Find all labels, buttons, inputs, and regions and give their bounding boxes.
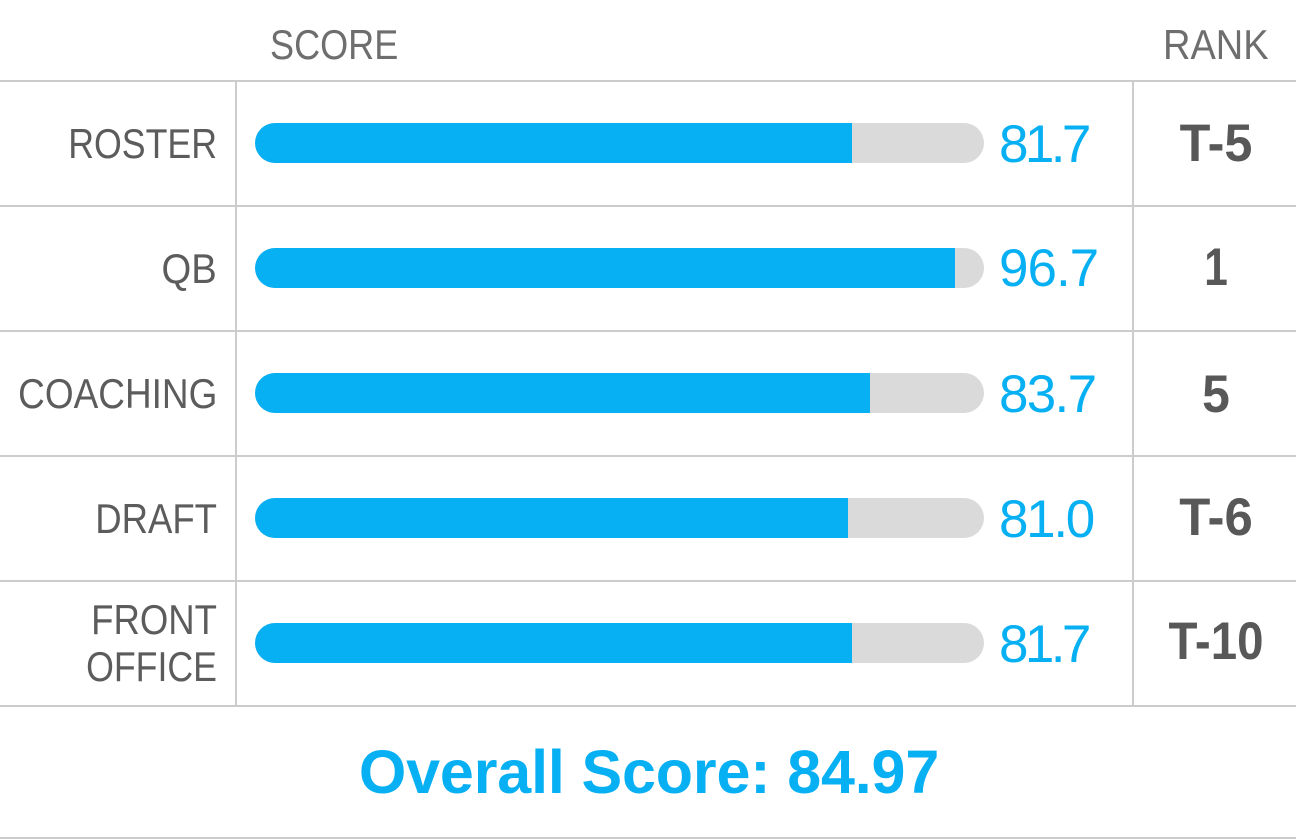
rank: draft: T-6	[1179, 488, 1253, 547]
row label: roster: ROSTER	[68, 120, 217, 167]
rank: roster: T-5	[1180, 114, 1252, 173]
score: draft: 81.0	[999, 490, 1093, 549]
rank: front office: T-10	[1169, 612, 1263, 671]
column header: score: SCORE	[270, 21, 398, 68]
row label: draft: DRAFT	[95, 495, 217, 542]
row label: front office: FRONT	[91, 596, 217, 643]
column header: rank: RANK	[1163, 21, 1269, 68]
row label: front office	[86, 596, 217, 690]
bar: qb	[255, 248, 984, 288]
rank: qb: 1	[1204, 238, 1228, 297]
row label: front office: OFFICE	[86, 643, 217, 690]
score: coaching: 83.7	[999, 365, 1095, 424]
bar: coaching	[255, 373, 984, 413]
overall score: Overall Score: 84.97	[359, 738, 939, 806]
score: front office: 81.7	[999, 615, 1088, 674]
bar: front office	[255, 623, 984, 663]
row label: qb: QB	[162, 245, 217, 292]
score: qb: 96.7	[999, 239, 1098, 298]
score: roster: 81.7	[999, 115, 1088, 174]
bar: draft	[255, 498, 984, 538]
bar: roster	[255, 123, 984, 163]
rank: coaching: 5	[1202, 365, 1230, 424]
row label: coaching: COACHING	[18, 370, 217, 417]
